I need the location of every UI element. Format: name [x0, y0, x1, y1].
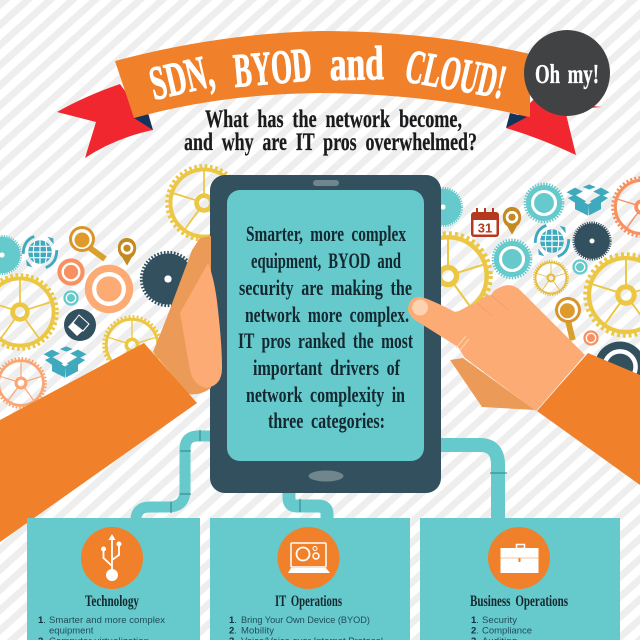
- list: Technology drivers: equipment: [49, 626, 94, 636]
- icon: middle teal ring gear: [493, 240, 531, 278]
- tablet body text: IT pros ranked the most: [238, 328, 413, 353]
- icon: coral ring: [57, 258, 85, 286]
- icon: USB: [81, 527, 143, 589]
- subtitle: What has the network become,: [205, 106, 462, 133]
- icon: left globe: [23, 236, 57, 268]
- icon: right map pin: [503, 207, 521, 235]
- pipe: to Technology: [136, 430, 212, 520]
- title: SDN,: [145, 45, 219, 111]
- heading: Technology: Technology: [85, 593, 139, 610]
- icon: left teal box: [44, 346, 86, 378]
- icon: lower yellow gear: [104, 316, 160, 374]
- pipe: to IT Operations: [289, 490, 327, 520]
- icon: peach ring: [85, 265, 133, 313]
- icon: left teal gear: [0, 236, 21, 274]
- list: IT Operations drivers: 2.: [229, 626, 237, 636]
- tablet screen: [227, 190, 424, 461]
- tablet body text: network more complex.: [245, 302, 409, 327]
- list: Business Operations drivers: 2.: [471, 626, 479, 636]
- subtitle: [184, 106, 477, 156]
- icon: navy gear: [141, 252, 195, 306]
- title: BYOD: [231, 38, 314, 98]
- icon: right globe: [535, 225, 569, 257]
- title: [145, 37, 511, 111]
- list: IT Operations drivers: Bring Your Own Device (BYOD): [241, 615, 370, 626]
- tablet body text: three categories:: [268, 408, 385, 433]
- icon: top teal ring gear: [525, 184, 563, 222]
- left sleeve: [0, 343, 197, 542]
- list: IT Operations drivers: [229, 615, 383, 640]
- icon: navy ring: [594, 342, 640, 392]
- list: Business Operations drivers: Security: [482, 615, 517, 626]
- panel: Technology: [27, 518, 200, 640]
- tablet home button: [308, 470, 344, 482]
- title: and: [329, 37, 384, 91]
- heading: IT Operations: IT Operations: [275, 593, 342, 610]
- list: Technology drivers: [38, 615, 165, 640]
- icon: calendar: 31: [478, 220, 492, 236]
- panel: Business Operations: [420, 518, 620, 640]
- list: Technology drivers: Smarter and more complex: [49, 615, 165, 626]
- list: Business Operations drivers: [471, 615, 532, 640]
- title: CLOUD!: [401, 40, 511, 109]
- ribbon: left tail: [57, 84, 153, 158]
- gears and technology icons cluster: [0, 166, 640, 408]
- right sleeve: [537, 353, 640, 485]
- icon: right teal box: [567, 184, 609, 216]
- connector pipes: [136, 430, 507, 520]
- ribbon: right tail: [506, 100, 602, 155]
- right hand: [408, 285, 585, 411]
- subtitle: and why are IT pros overwhelmed?: [184, 129, 477, 156]
- list: IT Operations drivers: 1.: [229, 615, 237, 626]
- icon: right navy gear: [573, 222, 611, 260]
- tablet body text: [238, 221, 413, 433]
- list: Business Operations drivers: 1.: [471, 615, 479, 626]
- icon: calendar: [471, 208, 499, 237]
- icon: teal gear behind tablet: [424, 188, 462, 226]
- title banner: [115, 31, 530, 118]
- icon: top yellow gear: [167, 166, 241, 240]
- tablet body text: network complexity in: [246, 382, 405, 407]
- icon: briefcase: [488, 527, 550, 589]
- icon: left map pin: [118, 238, 136, 266]
- icon: yellow gear behind tablet: [405, 233, 491, 319]
- icon: big left yellow gear: [0, 275, 57, 349]
- icon: left magnifier: [69, 226, 105, 259]
- tablet: [210, 175, 441, 493]
- list: Business Operations drivers: Compliance: [482, 626, 532, 636]
- tablet body text: Smarter, more complex: [246, 221, 406, 246]
- tablet body text: important drivers of: [253, 355, 400, 380]
- tablet body text: equipment, BYOD and: [251, 248, 401, 273]
- left hand: [153, 236, 222, 394]
- icon: navy book badge: [64, 309, 96, 341]
- icon: small teal ring: [63, 290, 79, 306]
- icon: big right yellow gear: [585, 254, 640, 336]
- heading: Business Operations: Business Operations: [470, 593, 568, 610]
- icon: small coral ring: [583, 330, 599, 346]
- panel: IT Operations: [210, 518, 410, 640]
- pipe: to Business Operations: [438, 445, 507, 520]
- badge: Oh my!: Oh my!: [535, 59, 599, 89]
- list: Technology drivers: 1.: [38, 615, 46, 626]
- badge: Oh my!: [524, 30, 610, 116]
- icon: small yellow gear: [534, 261, 568, 295]
- list: IT Operations drivers: Mobility: [241, 626, 274, 636]
- icon: laptop: [278, 527, 340, 589]
- icon: coral gear: [613, 178, 640, 236]
- icon: right small teal ring: [572, 259, 588, 275]
- tablet body text: security are making the: [239, 275, 412, 300]
- icon: lower left peach gear: [0, 358, 46, 408]
- tablet speaker: [313, 180, 339, 186]
- icon: right magnifier: [545, 292, 594, 340]
